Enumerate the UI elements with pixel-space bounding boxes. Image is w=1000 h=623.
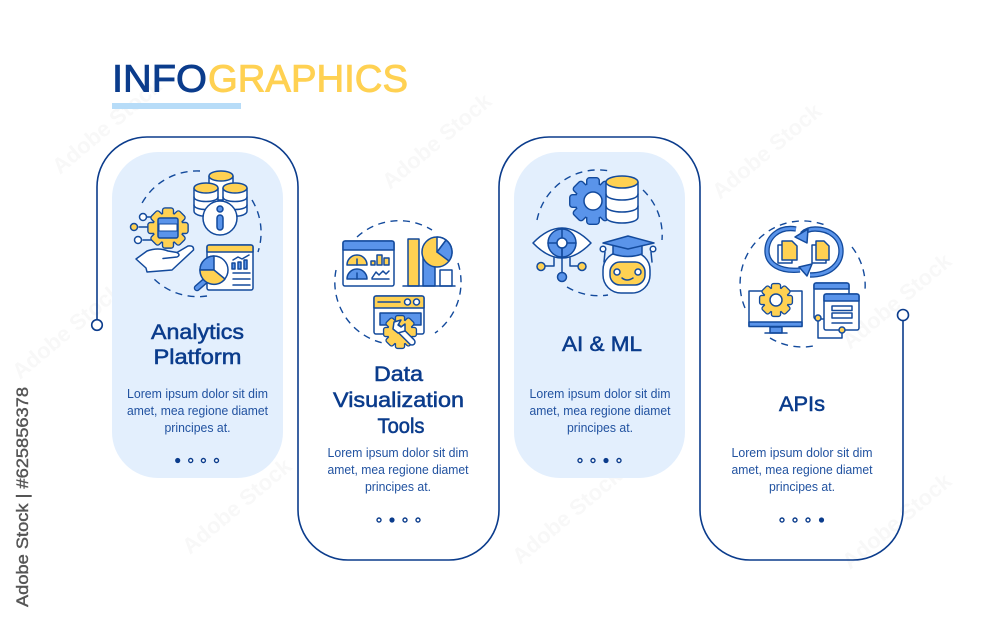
text: Adobe Stock <box>7 278 127 384</box>
icon: analytics platform <box>130 171 261 297</box>
pagination dots: card 2 <box>377 517 420 523</box>
panel: card 3 background <box>514 152 685 478</box>
text: Adobe Stock <box>47 73 167 179</box>
heading: APIs: APIs <box>779 392 825 416</box>
icon: AI and ML <box>533 170 662 296</box>
text: card 3 body: Lorem ipsum dolor sit dim <box>530 387 670 401</box>
text: card 4 body: principes at. <box>769 480 835 494</box>
text: card 2 body: amet, mea regione diamet <box>328 463 469 477</box>
icon: browser with gear and wrench <box>374 296 424 348</box>
heading: data visualization tools: Visualization <box>333 388 464 412</box>
icon: monitor with gear <box>749 284 802 333</box>
icon: APIs <box>740 221 865 347</box>
title <box>112 58 408 100</box>
heading: analytics platform: Platform <box>154 345 242 369</box>
heading: analytics platform: Analytics <box>151 320 244 344</box>
text: card 1 body: amet, mea regione diamet <box>127 404 269 418</box>
icon: graduate robot <box>600 236 656 293</box>
text: card 3 body <box>530 387 671 435</box>
icon: report with pie magnifier <box>197 245 253 290</box>
text: card 2 body <box>328 446 469 494</box>
icon: databases with info <box>194 171 247 235</box>
icon: dashboard <box>343 241 394 286</box>
text: card 1 body <box>127 387 269 435</box>
icon: data visualization tools <box>335 221 461 348</box>
pagination dots: card 1 <box>175 458 218 463</box>
text: card 2 body: principes at. <box>365 480 431 494</box>
stock id watermark: Adobe Stock | #625856378 <box>13 387 32 607</box>
title: INFO <box>112 58 207 100</box>
icon: gear and database <box>570 176 638 224</box>
text: card 1 body: Lorem ipsum dolor sit dim <box>127 387 268 401</box>
title: GRAPHICS <box>208 58 408 100</box>
heading: AI & ML: AI & ML <box>562 332 642 356</box>
text: Adobe Stock <box>837 468 957 574</box>
text: card 1 body: principes at. <box>164 421 230 435</box>
text: card 3 body: amet, mea regione diamet <box>530 404 671 418</box>
heading: data visualization tools: Data <box>374 362 423 386</box>
pagination dots: card 4 <box>780 517 824 523</box>
heading: data visualization tools <box>333 362 464 438</box>
icon: hand <box>136 246 194 272</box>
icon: gear with nodes <box>130 209 187 247</box>
icon: eye with circuit <box>533 228 591 282</box>
text: Adobe Stock <box>837 248 957 354</box>
text: card 4 body <box>732 446 873 494</box>
text: Adobe Stock <box>377 88 497 194</box>
text: card 3 body: principes at. <box>567 421 633 435</box>
text: Adobe Stock <box>177 453 297 559</box>
pagination dots: card 3 <box>578 458 621 463</box>
title underline <box>112 103 241 109</box>
text: Adobe Stock <box>707 98 827 204</box>
icon: windows and connectors <box>814 283 859 338</box>
panel: card 1 background <box>112 152 283 478</box>
text: Adobe Stock <box>507 463 627 569</box>
icon: bar and pie chart <box>403 237 455 286</box>
icon: cycle arrows with documents <box>767 229 841 276</box>
text: card 4 body: Lorem ipsum dolor sit dim <box>732 446 872 460</box>
text: card 4 body: amet, mea regione diamet <box>732 463 873 477</box>
heading: analytics platform <box>151 320 244 369</box>
heading: data visualization tools: Tools <box>378 414 424 438</box>
timeline outline <box>92 137 908 560</box>
text: card 2 body: Lorem ipsum dolor sit dim <box>328 446 468 460</box>
